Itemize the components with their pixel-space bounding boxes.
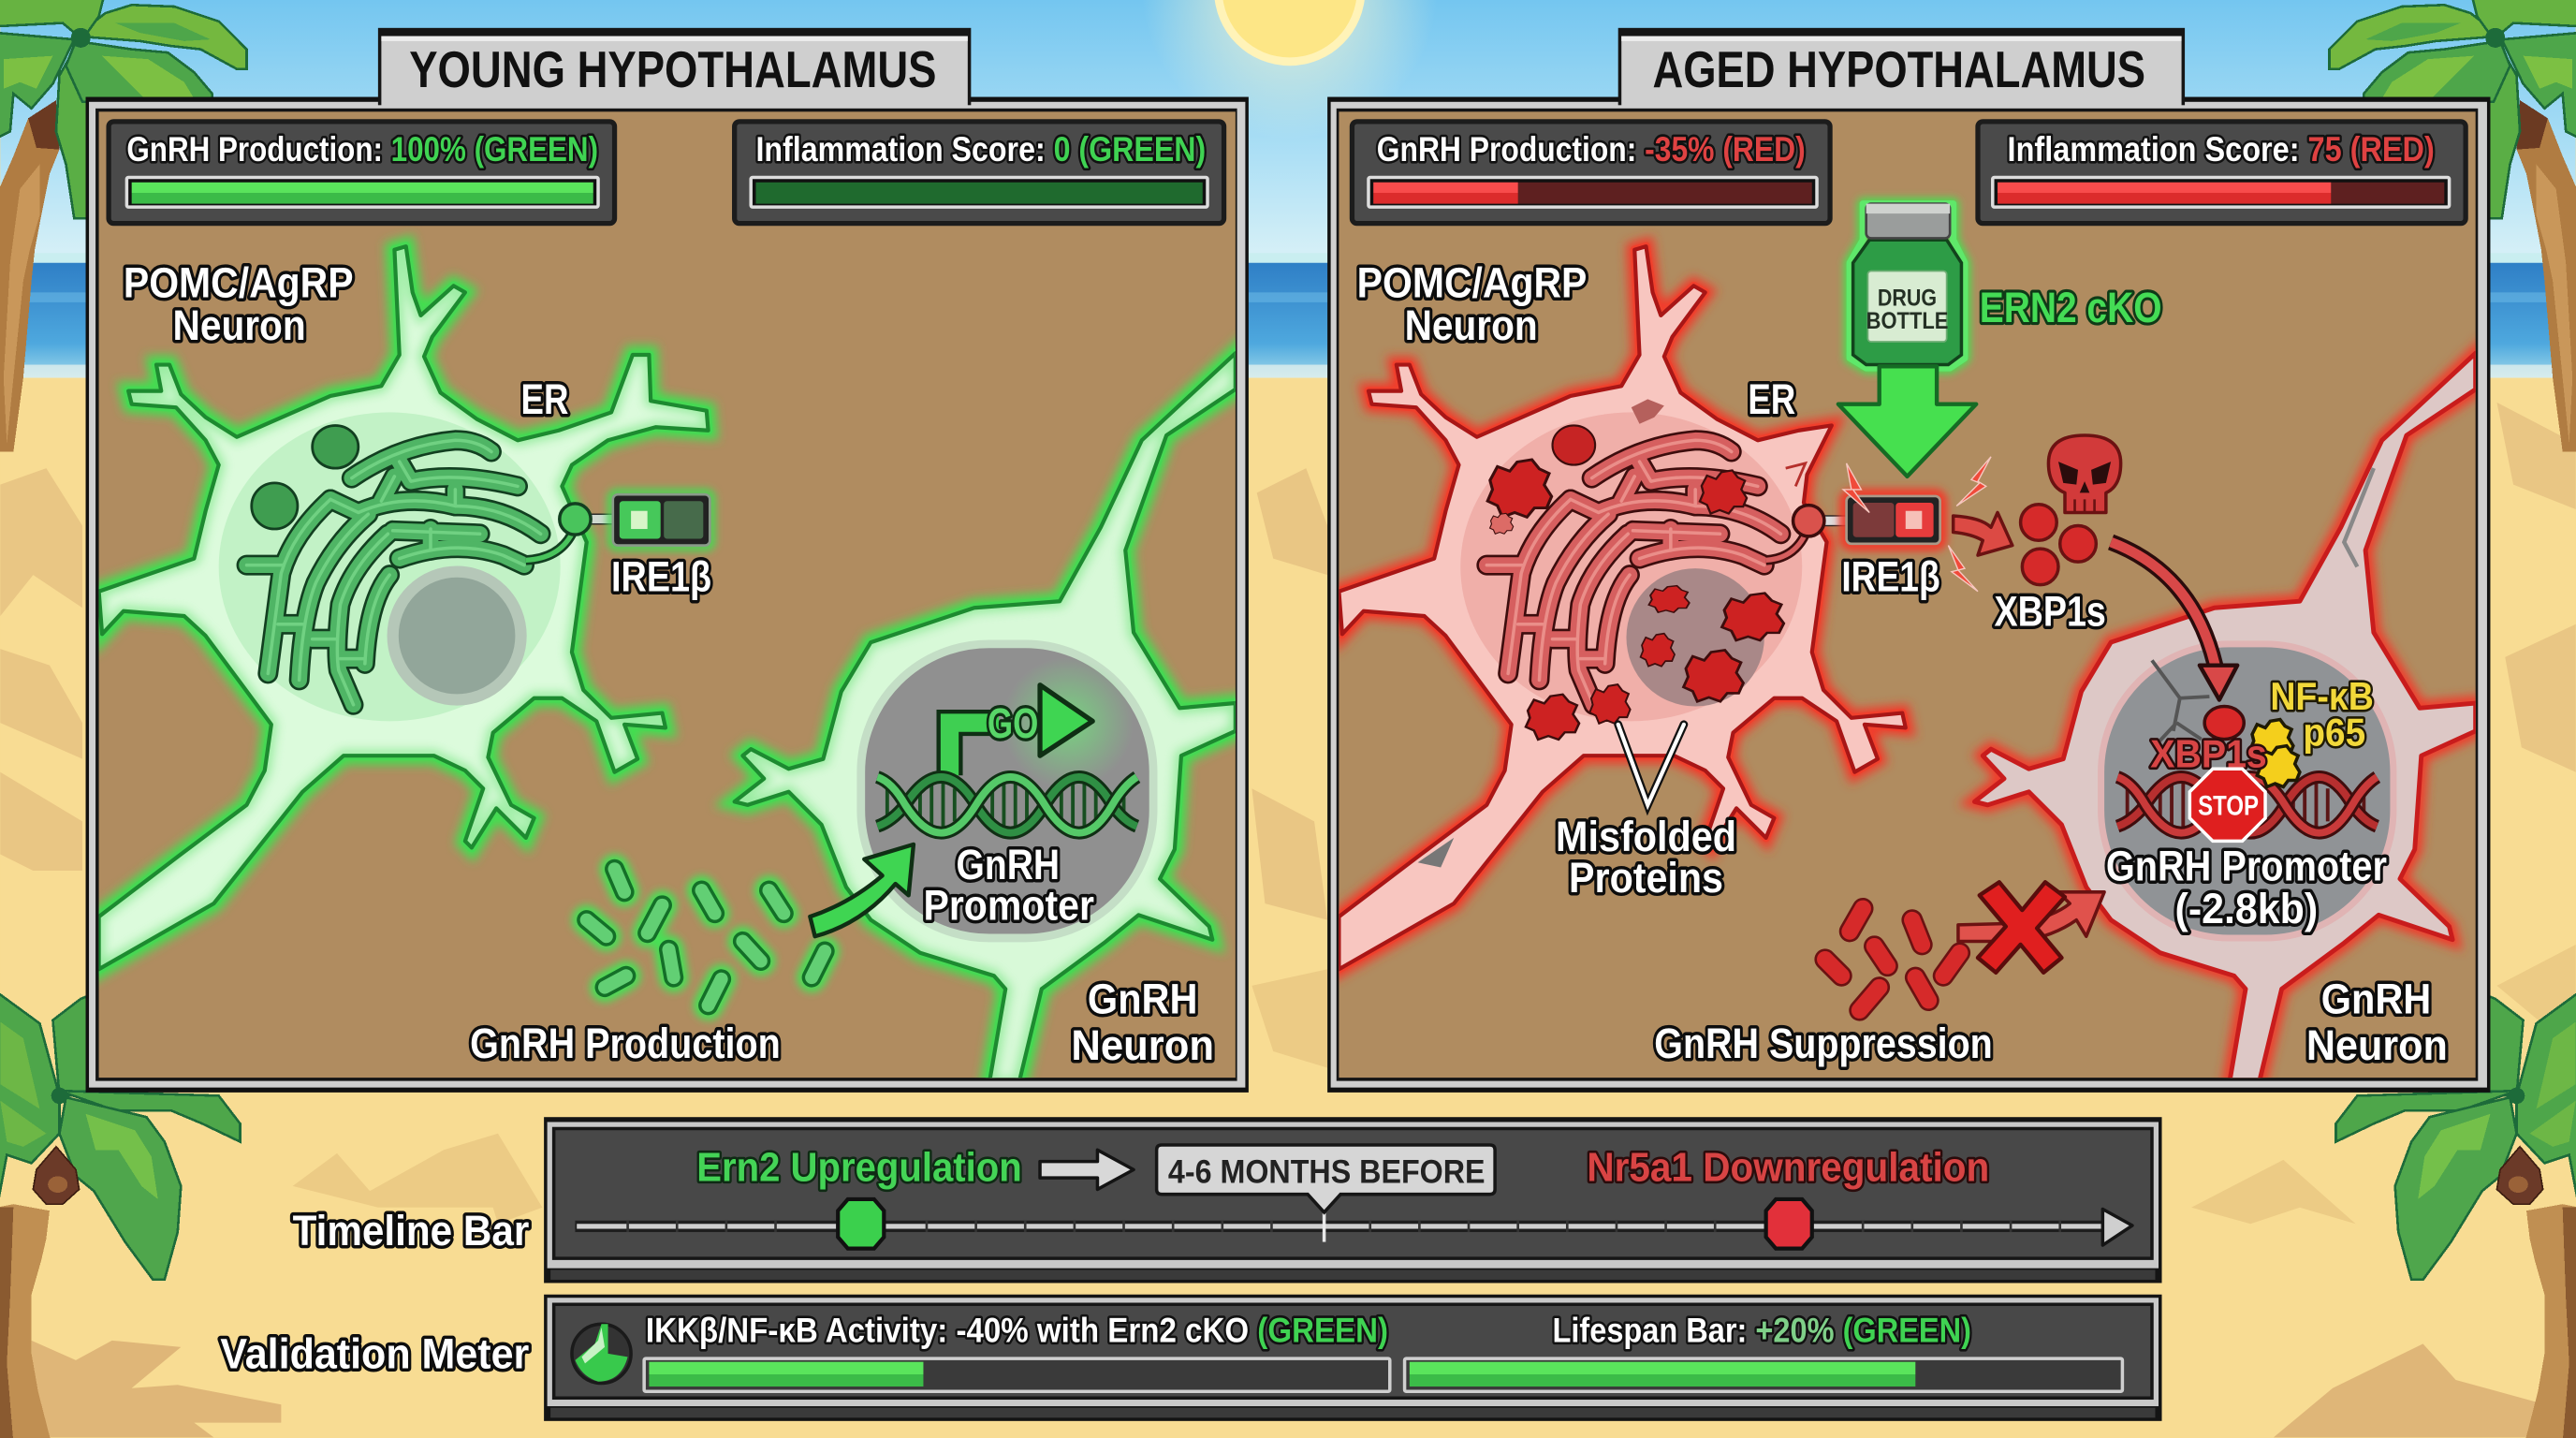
label: GnRH Neuron young: Neuron: [1071, 1021, 1214, 1069]
label: GnRH Promoter (-2.8kb): [2106, 843, 2387, 932]
label: POMC/AgRP Neuron aged: Neuron: [1405, 301, 1538, 349]
arrow: GO transcription: [950, 685, 1092, 775]
nucleus: [393, 572, 521, 700]
panel: aged hypothalamus: [1327, 28, 2490, 1093]
bar: lifespan: [1405, 1358, 2122, 1391]
timeline track: [575, 1209, 2132, 1245]
label: ER young: ER: [521, 375, 568, 423]
arrow: GO transcription: GO: [988, 699, 1038, 747]
icon: XBP1s molecules: [2021, 505, 2096, 585]
arrow: blocked to promoter: [1958, 892, 2104, 941]
label: POMC/AgRP Neuron young: POMC/AgRP: [124, 259, 354, 307]
label: Timeline Bar: Timeline Bar: [293, 1207, 530, 1255]
label: GnRH Neuron young: GnRH: [1088, 976, 1197, 1023]
label: POMC/AgRP Neuron aged: [1357, 259, 1587, 349]
peptides: GnRH red suppressed: [1825, 908, 1960, 1010]
DNA green: [877, 777, 1137, 833]
label: IRE1 beta young: IRE1β: [611, 553, 711, 601]
arrow: peptides to promoter: [810, 844, 914, 936]
icon: activity gauge: [572, 1324, 631, 1383]
icon: XBP1s bound molecule: [2204, 707, 2244, 740]
icon: skull: [2048, 435, 2121, 512]
label: GnRH Neuron aged: Neuron: [2306, 1021, 2448, 1069]
label: XBP1s: XBP1s: [1995, 588, 2106, 636]
meter: inflammation score 0: Inflammation Score: 0 (GREEN): [755, 130, 1206, 169]
arrow: XBP1s to promoter: [2111, 542, 2237, 700]
meter: inflammation score 75: [1978, 122, 2466, 224]
ER stacks: [247, 440, 541, 705]
panel: validation meter: [544, 1295, 2162, 1421]
marker: Ern2 green: [838, 1199, 884, 1249]
callout: 4-6 months before: [1157, 1145, 1495, 1242]
callout: 4-6 months before: 4-6 MONTHS BEFORE: [1168, 1153, 1486, 1190]
icon: palm tree bottom left: [0, 992, 240, 1438]
label: NF-kB p65: [2270, 674, 2374, 755]
label: Nr5a1 Downregulation: Nr5a1 Downregulation: [1587, 1145, 1989, 1191]
icon: palm tree top right: [2329, 0, 2576, 452]
icon: stop sign: [2189, 769, 2265, 841]
label: GnRH Neuron young: [1071, 976, 1214, 1069]
meter: GnRH production -35%: GnRH Production: -35% (RED): [1377, 130, 1806, 169]
neuron: GnRH young: [735, 353, 1236, 1084]
icon: palm tree top left: [0, 0, 247, 452]
icon: sun: [1214, 0, 1365, 66]
label: Ern2 Upregulation: Ern2 Upregulation: [696, 1145, 1022, 1191]
panel: timeline bar: [544, 1117, 2162, 1283]
pointer: misfolded proteins: [1618, 725, 1684, 805]
meter: GnRH production -35%: [1352, 122, 1830, 224]
label: ERN2 cKO: ERN2 cKO: [1980, 284, 2162, 331]
marker: Nr5a1 red: [1766, 1199, 1812, 1249]
meter: inflammation score 0: [735, 122, 1224, 224]
heading tab: aged: AGED HYPOTHALAMUS: [1653, 41, 2145, 98]
label: POMC/AgRP Neuron aged: POMC/AgRP: [1357, 259, 1587, 307]
switch: IRE1 beta aged: [1766, 494, 1941, 560]
label: NF-kB p65: NF-κB: [2270, 674, 2374, 718]
label: XBP1s bound: XBP1s: [2150, 731, 2267, 775]
arrow: drug to IRE1 beta: [1838, 366, 1976, 477]
label: GnRH Promoter (-2.8kb): GnRH Promoter: [2106, 843, 2387, 890]
label: Lifespan Bar: Lifespan Bar: +20% (GREEN): [1553, 1312, 1971, 1350]
misfolded protein clumps: [1487, 425, 1784, 740]
label: GnRH Promoter young: Promoter: [923, 882, 1094, 930]
label: Misfolded Proteins: Misfolded: [1556, 813, 1736, 860]
label: IKK beta NF-kB activity: IKKβ/NF-κB Activity: -40% with Ern2 cKO (GREEN): [646, 1312, 1388, 1350]
icon: drug bottle: BOTTLE: [1866, 309, 1948, 334]
label: IRE1 beta aged: IRE1β: [1841, 553, 1940, 601]
meter: inflammation score 75: Inflammation Score: 75 (RED): [2008, 130, 2435, 169]
heading tab: young: YOUNG HYPOTHALAMUS: [409, 41, 936, 98]
arrow: upregulation to callout: [1040, 1150, 1134, 1189]
icon: stop sign: STOP: [2198, 790, 2259, 821]
heading tab: aged: [1618, 28, 2185, 107]
label: ER aged: ER: [1748, 375, 1795, 423]
label: GnRH Neuron aged: [2306, 976, 2448, 1069]
neuron: POMC/AgRP young: [99, 246, 709, 969]
arrow: IRE1 beta to XBP1s: [1954, 512, 2012, 555]
meter: GnRH production 100%: GnRH Production: 100% (GREEN): [126, 130, 598, 169]
ER stacks damaged: [1486, 440, 1780, 705]
label: Misfolded Proteins: Proteins: [1569, 854, 1723, 902]
switch: IRE1 beta young: [526, 492, 711, 560]
icon: red X: [1978, 882, 2065, 973]
label: NF-kB p65: p65: [2303, 711, 2365, 755]
label: GnRH Suppression: GnRH Suppression: [1654, 1020, 1993, 1067]
neuron: POMC/AgRP aged: [1339, 246, 1906, 969]
label: POMC/AgRP Neuron young: Neuron: [173, 301, 306, 349]
icon: NF-kB complex: [2250, 720, 2300, 787]
label: Validation Meter: Validation Meter: [220, 1330, 530, 1378]
label: Misfolded Proteins: [1556, 813, 1736, 902]
label: GnRH Promoter (-2.8kb): (-2.8kb): [2175, 885, 2318, 932]
icon: drug bottle: DRUG: [1878, 286, 1937, 311]
neuron: GnRH aged: [1974, 353, 2476, 1084]
label: POMC/AgRP Neuron young: [124, 259, 354, 349]
icon: drug bottle: [1850, 204, 1965, 368]
panel: young hypothalamus: [86, 28, 1249, 1093]
DNA red blocked: [2117, 777, 2377, 833]
label: GnRH Promoter young: GnRH: [957, 841, 1060, 888]
icon: palm tree bottom right: [2336, 992, 2576, 1438]
peptides: GnRH green: [587, 869, 825, 1005]
icon: lightning sparks: [1843, 457, 1991, 592]
label: GnRH Neuron aged: GnRH: [2321, 976, 2431, 1023]
label: GnRH Promoter young: [923, 841, 1094, 930]
label: GnRH Production: GnRH Production: [470, 1020, 781, 1067]
heading tab: young: [378, 28, 971, 107]
bar: IKK beta NF-kB activity: [644, 1358, 1390, 1391]
meter: GnRH production 100%: [109, 122, 615, 224]
